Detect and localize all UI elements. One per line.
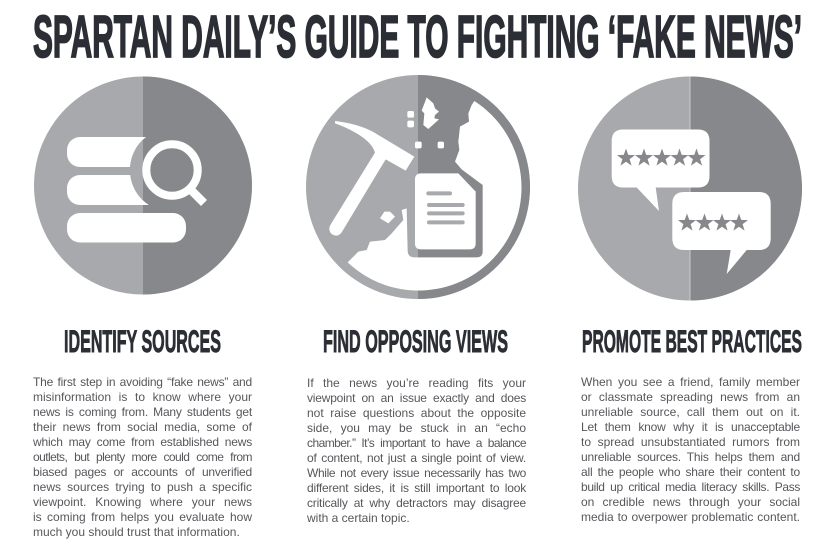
text block: identify sources [33,375,252,539]
text block: find opposing views: While not every issue necessarily has two [307,466,526,480]
text block: identify sources: viewpoint. Knowing where your news [33,495,252,509]
text block: find opposing views: not raise questions about the opposite [307,406,526,420]
text block: find opposing views: with a certain topic. [307,511,410,525]
text block: promote best practices: all the people who share their content to [581,465,800,479]
text block: identify sources: much you should trust that information. [33,525,240,539]
text block: promote best practices: to spread unsubstantiated rumors from [581,435,800,449]
text block: identify sources: their news from social media, some of [33,420,252,434]
text block: identify sources: news sources trying to push a specific [33,480,252,494]
icon: speech bubbles with star ratings [578,76,802,300]
text block: promote best practices: media to overpower problematic content. [581,510,800,524]
text block: find opposing views [307,376,526,525]
text block: identify sources: is coming from helps you evaluate how [33,510,252,524]
text block: find opposing views: of content, not just a single point of view. [307,451,526,465]
text block: promote best practices: unreliable sources. This helps them and [581,450,800,464]
text block: identify sources: news is coming from. Many students get [33,405,252,419]
text block: promote best practices: build up critical media literacy skills. Pass [581,480,800,494]
text block: find opposing views: chamber.” It’s important to have a balance [307,436,526,450]
text block: find opposing views: different sides, it is still important to look [307,481,526,495]
text block: promote best practices: When you see a friend, family member [581,375,800,389]
text block: find opposing views: If the news you’re reading fits your [307,376,526,390]
text block: promote best practices [581,375,800,524]
text block: identify sources: which may come from established news [33,435,252,449]
text block: identify sources: The first step in avoiding “fake news” and [33,375,252,389]
text block: find opposing views: critically at why detractors may disagree [307,496,526,510]
text block: promote best practices: or classmate spreading news from an [581,390,800,404]
text block: identify sources: outlets, but plenty more could come from [33,450,252,464]
text block: promote best practices: Let them know why it is unacceptable [581,420,800,434]
text block: find opposing views: side, you may be stuck in an “echo [307,421,526,435]
text block: identify sources: misinformation is to know where your [33,390,252,404]
icon: sources with magnifying glass [34,76,252,294]
icon: pickaxe breaking through to a document [306,75,530,299]
text block: find opposing views: viewpoint on an issue exactly and does [307,391,526,405]
heading: identify sources: IDENTIFY SOURCES [64,323,221,359]
heading: find opposing views: FIND OPPOSING VIEWS [323,323,508,359]
text block: promote best practices: unreliable source, call them out on it. [581,405,800,419]
text block: promote best practices: on credible news through your social [581,495,800,509]
text block: identify sources: biased pages or accounts of unverified [33,465,252,479]
